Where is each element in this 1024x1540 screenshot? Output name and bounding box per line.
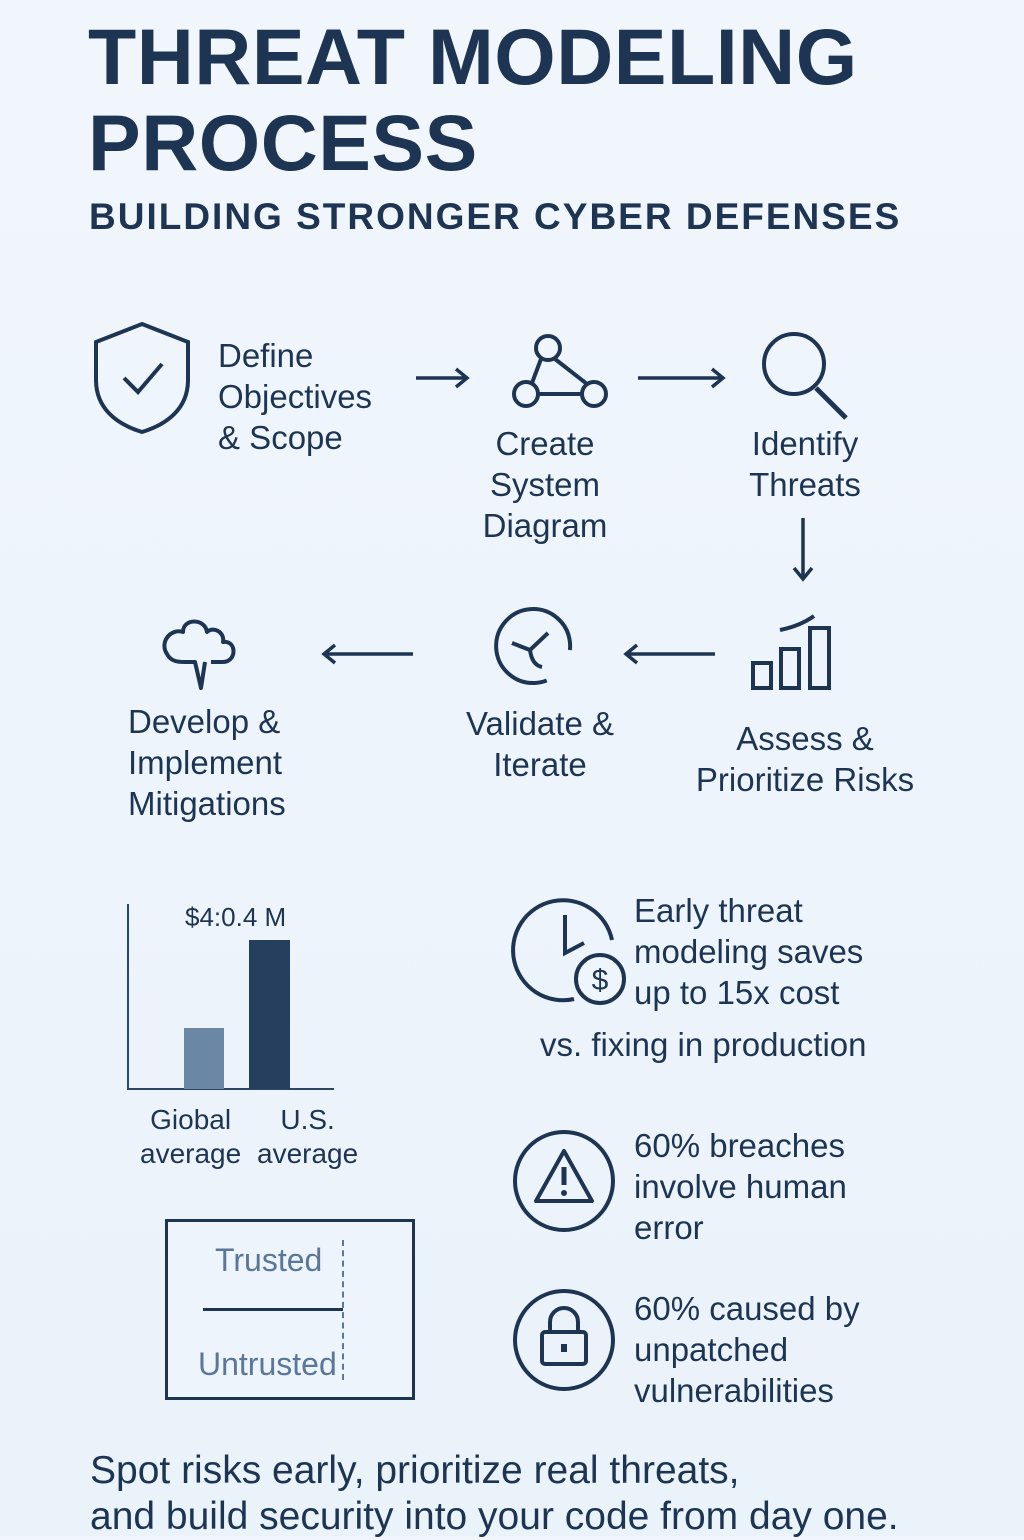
icon: network: [512, 334, 608, 408]
label: [749, 425, 861, 503]
label: Prioritize Risks: [696, 761, 914, 798]
icon: bar chart: [751, 614, 831, 690]
title: THREAT MODELING: [88, 12, 858, 101]
footer text: Spot risks early, prioritize real threats,: [90, 1449, 740, 1492]
label: System: [490, 466, 600, 503]
stat: cost savings: Early threat: [634, 892, 803, 929]
label: Develop &: [128, 703, 280, 740]
value label: $4:0.4 M: [185, 902, 286, 932]
label: [466, 705, 614, 783]
arrow: [638, 368, 726, 388]
title: [88, 12, 858, 187]
label: Iterate: [493, 746, 587, 783]
label: [483, 425, 607, 544]
arrow: [623, 644, 715, 664]
icon: magnifier: [762, 332, 848, 420]
icon: clock: [494, 607, 572, 685]
arrow: [321, 644, 413, 664]
bar chart: average: [257, 1138, 358, 1169]
label: Validate &: [466, 705, 614, 742]
bar chart: U.S.: [280, 1104, 335, 1135]
arrow down: [792, 518, 814, 582]
step 3: identify threats: [749, 332, 861, 503]
label: Assess &: [736, 720, 874, 757]
stat: unpatched: unpatched: [634, 1331, 788, 1368]
trust boundary diagram: [165, 1219, 415, 1400]
stat: human error: 60% breaches: [634, 1127, 845, 1164]
footer text: and build security into your code from day one.: [90, 1495, 899, 1538]
label: Mitigations: [128, 785, 286, 822]
label: [128, 703, 286, 822]
stat: human error: error: [634, 1209, 704, 1246]
axis labels: [140, 1104, 241, 1169]
subtitle: BUILDING STRONGER CYBER DEFENSES: [89, 196, 901, 237]
label: & Scope: [218, 419, 343, 456]
bar chart: [127, 902, 358, 1169]
icon: warning: [513, 1130, 615, 1232]
icon: clock dollar: [511, 898, 626, 1005]
label: Create: [495, 425, 595, 462]
axis labels: average: [140, 1138, 241, 1169]
step 1: define objectives: [94, 322, 372, 456]
stat: unpatched: [513, 1289, 860, 1409]
stat: cost savings: vs. fixing in production: [540, 1026, 867, 1063]
label: Implement: [128, 744, 282, 781]
label: Objectives: [218, 378, 372, 415]
stat: cost savings: modeling saves: [634, 933, 863, 970]
stat: unpatched: vulnerabilities: [634, 1372, 834, 1409]
stat: human error: involve human: [634, 1168, 847, 1205]
icon: lock: [513, 1289, 615, 1391]
label: Threats: [749, 466, 861, 503]
label: Diagram: [483, 507, 607, 544]
step 4: assess risks: [696, 614, 914, 798]
label: Define: [218, 337, 313, 374]
trust boundary diagram: Untrusted: [198, 1346, 337, 1382]
arrow: [416, 368, 470, 388]
step 6: develop mitigations: [128, 620, 286, 822]
trust boundary diagram: Trusted: [215, 1242, 322, 1278]
step 5: validate & iterate: [466, 607, 614, 783]
label: [218, 337, 372, 456]
stat: cost savings: up to 15x cost: [634, 974, 839, 1011]
label: Identify: [752, 425, 858, 462]
stat: cost savings: [511, 892, 867, 1063]
icon: cloud: [162, 620, 236, 690]
stat: unpatched: 60% caused by: [634, 1290, 860, 1327]
axis labels: Giobal: [150, 1104, 231, 1135]
title: PROCESS: [88, 98, 478, 187]
step 2: create system diagram: [483, 334, 608, 544]
footer text: [90, 1449, 899, 1538]
icon: clock dollar: $: [592, 964, 609, 997]
icon: shield: [94, 322, 190, 434]
stat: human error: [513, 1127, 847, 1246]
label: [696, 720, 914, 798]
